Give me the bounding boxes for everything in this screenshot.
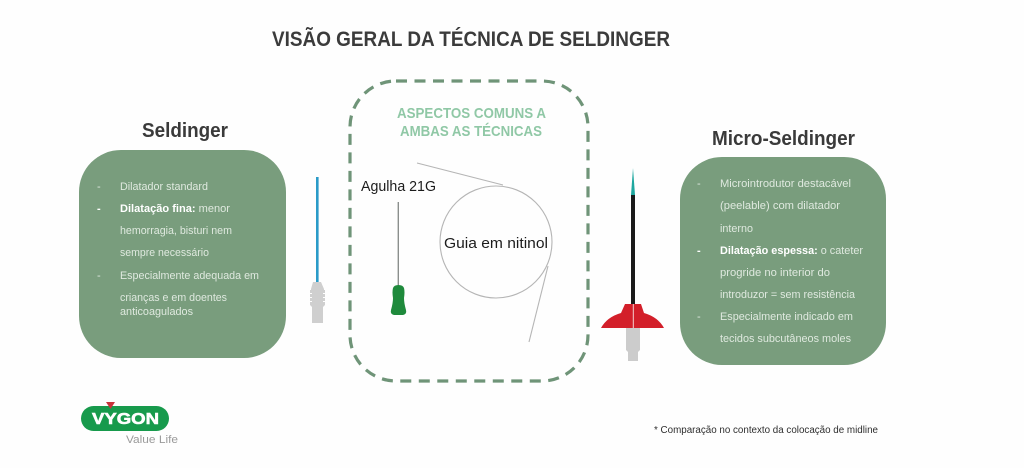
text block: Seldinger list: crianças e em doentes: [120, 292, 227, 304]
text block: Seldinger list: hemorragia, bisturi nem: [120, 225, 232, 237]
text block: Seldinger list: -: [97, 203, 101, 215]
text block: Micro-Seldinger list: interno: [720, 223, 753, 235]
heading: Micro-Seldinger: Micro-Seldinger: [712, 128, 855, 150]
footnote: * Comparação no contexto da colocação de midline: [654, 425, 878, 436]
card: Micro-Seldinger background: [680, 157, 886, 365]
text block: Micro-Seldinger list: Microintrodutor destacável: [720, 178, 851, 190]
text block: Micro-Seldinger list: progride no interior do: [720, 267, 830, 279]
text block: Seldinger list: -: [97, 270, 101, 282]
text block: Seldinger list: Dilatador standard: [120, 181, 208, 193]
label: needle: Agulha 21G: [361, 178, 436, 195]
text block: Micro-Seldinger list: (peelable) com dilatador: [720, 200, 840, 212]
text block: Micro-Seldinger list: [697, 178, 863, 345]
icon: nitinol guidewire: [417, 163, 552, 342]
heading: Seldinger: Seldinger: [142, 120, 228, 142]
icon: standard dilator: [310, 177, 325, 323]
panel: common aspects: AMBAS AS TÉCNICAS: [400, 123, 542, 140]
logo: Vygon: [81, 402, 178, 446]
panel: Seldinger: [79, 120, 286, 358]
panel: common aspects: [350, 81, 588, 381]
text block: Seldinger list: -: [97, 181, 101, 193]
card: Seldinger background: [79, 150, 286, 358]
panel: Micro-Seldinger: [680, 128, 886, 365]
logo: Vygon: VYGON: [92, 411, 159, 428]
text block: Micro-Seldinger list: -: [697, 311, 701, 323]
text block: Micro-Seldinger list: Dilatação espessa: o cateter: [720, 245, 863, 257]
icon: micro-introducer: [601, 168, 664, 361]
text block: Micro-Seldinger list: -: [697, 245, 701, 257]
text block: Micro-Seldinger list: tecidos subcutâneos moles: [720, 333, 851, 345]
title: VISÃO GERAL DA TÉCNICA DE SELDINGER: [272, 28, 670, 51]
text block: Seldinger list: Especialmente adequada em: [120, 270, 259, 282]
label: guidewire: Guia em nitinol: [444, 235, 548, 252]
text block: Micro-Seldinger list: -: [697, 178, 701, 190]
text block: Micro-Seldinger list: introduzor = sem resistência: [720, 289, 856, 301]
logo: Vygon: Value Life: [126, 434, 178, 446]
icon: 21G needle: [391, 202, 406, 315]
heading: common aspects: ASPECTOS COMUNS A: [397, 105, 546, 122]
text block: Seldinger list: sempre necessário: [120, 247, 209, 259]
text block: Micro-Seldinger list: Especialmente indicado em: [720, 311, 853, 323]
text block: Seldinger list: anticoagulados: [120, 306, 193, 318]
text block: Seldinger list: Dilatação fina: menor: [120, 203, 230, 215]
text block: Seldinger list: [97, 181, 259, 318]
dashed frame: [350, 81, 588, 381]
